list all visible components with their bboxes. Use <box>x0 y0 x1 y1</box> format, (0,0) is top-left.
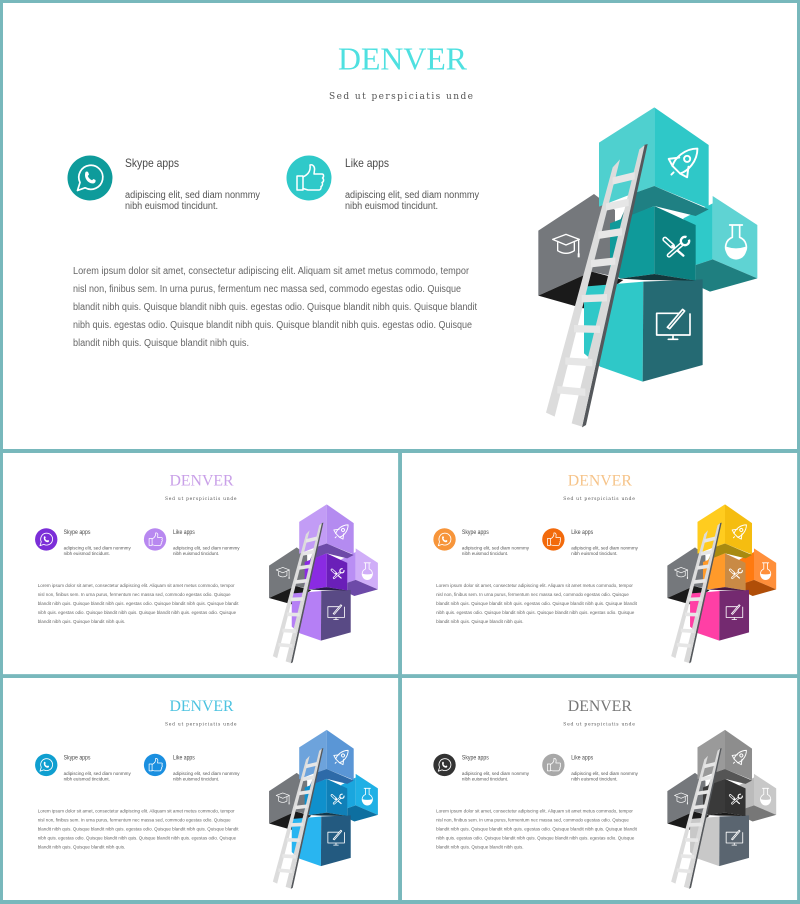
body text: blandit nibh quis. Quisque blandit nibh quis. egestas odio. Quisque blandit nibh quis. Quisque blandit <box>73 302 477 313</box>
cube: rocket <box>299 730 354 786</box>
subtitle: Sed ut perspiciatis unde <box>563 496 635 502</box>
cube: flask <box>683 196 757 292</box>
feature: Skype apps <box>125 156 260 212</box>
body text: Lorem ipsum dolor sit amet, consectetur adipiscing elit. Aliquam sit amet metus commodo, tempor <box>73 266 470 277</box>
title: DENVER <box>169 698 234 715</box>
icon: chat badge <box>433 528 456 551</box>
feature: Like apps: Like apps <box>173 755 195 761</box>
feature: Like apps: Like apps <box>571 530 593 536</box>
subtitle: Sed ut perspiciatis unde <box>329 92 473 102</box>
feature: Like apps: adipiscing elit, sed diam nonmmy <box>345 190 479 201</box>
cube and ladder graphic <box>269 730 378 889</box>
feature: Like apps: adipiscing elit, sed diam nonmmy <box>173 545 240 551</box>
ladder <box>273 748 323 889</box>
cube: flask <box>739 548 776 596</box>
body text: blandit nibh quis. Quisque blandit nibh quis. <box>38 844 125 850</box>
body text: Lorem ipsum dolor sit amet, consectetur adipiscing elit. Aliquam sit amet metus commodo, tempor <box>38 809 235 815</box>
feature: Like apps: adipiscing elit, sed diam nonmmy <box>173 771 240 777</box>
body text: nibh quis. egestas odio. Quisque blandit nibh quis. Quisque blandit nibh quis. egestas odio. Quisque <box>38 836 236 842</box>
feature: Like apps: nibh euismod tincidunt. <box>173 551 219 557</box>
cube: tools <box>703 779 746 816</box>
icon: thumbs up badge <box>542 754 565 776</box>
body text: Lorem ipsum dolor sit amet, consectetur adipiscing elit. Aliquam sit amet metus commodo, tempor <box>436 809 633 815</box>
feature: Like apps: nibh euismod tincidunt. <box>173 776 219 782</box>
cube and ladder graphic <box>667 730 776 889</box>
panel: teal main slide <box>3 3 797 449</box>
feature: Like apps: nibh euismod tincidunt. <box>345 201 438 212</box>
feature: Skype apps: nibh euismod tincidunt. <box>64 776 110 782</box>
body text: blandit nibh quis. Quisque blandit nibh quis. egestas odio. Quisque blandit nibh quis. Quisque blandit <box>38 601 239 607</box>
body text: blandit nibh quis. Quisque blandit nibh quis. <box>38 619 125 625</box>
feature: Skype apps: Skype apps <box>64 530 90 536</box>
ladder <box>671 523 722 663</box>
body text: Lorem ipsum dolor sit amet, consectetur adipiscing elit. Aliquam sit amet metus commodo, tempor <box>436 583 633 589</box>
ladder <box>546 144 648 427</box>
cube: flask <box>341 548 378 596</box>
body text: blandit nibh quis. Quisque blandit nibh quis. egestas odio. Quisque blandit nibh quis. Quisque blandit <box>38 827 239 833</box>
title: DENVER <box>568 473 632 490</box>
panel: orange slide <box>402 453 797 674</box>
body text: nibh quis. egestas odio. Quisque blandit nibh quis. Quisque blandit nibh quis. egestas odio. Quisque <box>38 610 236 616</box>
title: DENVER <box>338 40 468 76</box>
cube: graduation cap <box>667 547 710 604</box>
body text <box>38 583 239 625</box>
body text: blandit nibh quis. Quisque blandit nibh quis. <box>73 338 249 349</box>
cube: rocket <box>599 107 709 221</box>
panel: blue slide <box>3 678 398 900</box>
body text <box>38 809 239 850</box>
feature: Like apps <box>173 755 240 782</box>
body text: nibh quis. egestas odio. Quisque blandit nibh quis. Quisque blandit nibh quis. egestas odio. Quisque <box>73 320 472 331</box>
cube: rocket <box>299 504 354 561</box>
feature: Skype apps: nibh euismod tincidunt. <box>125 201 218 212</box>
subtitle: Sed ut perspiciatis unde <box>165 496 237 502</box>
icon: chat badge <box>35 754 57 776</box>
cube: tools <box>703 553 746 590</box>
feature: Like apps: Like apps <box>173 530 195 536</box>
feature: Like apps: Like apps <box>571 755 593 761</box>
body text <box>436 583 637 625</box>
body text: nisl non, finibus sem. In urna purus, fermentum nec massa sed, commodo egestas odio. Quisque <box>38 818 231 824</box>
cube and ladder graphic <box>269 504 378 663</box>
feature: Like apps: nibh euismod tincidunt. <box>571 776 617 782</box>
feature: Skype apps: nibh euismod tincidunt. <box>64 551 110 557</box>
feature: Like apps: adipiscing elit, sed diam nonmmy <box>571 545 638 551</box>
icon: thumbs up badge <box>286 156 332 200</box>
cube: tools <box>305 553 347 590</box>
cube: graduation cap <box>667 773 710 830</box>
feature: Like apps <box>345 156 479 212</box>
icon: chat badge <box>433 754 456 776</box>
icon: thumbs up badge <box>144 754 166 776</box>
body text: nibh quis. egestas odio. Quisque blandit nibh quis. Quisque blandit nibh quis. egestas odio. Quisque <box>436 610 635 616</box>
panel: purple slide <box>3 453 398 674</box>
panel: grey slide <box>402 678 797 900</box>
cube and ladder graphic <box>538 107 757 427</box>
cube: monitor <box>690 815 749 866</box>
body text: blandit nibh quis. Quisque blandit nibh quis. egestas odio. Quisque blandit nibh quis. Quisque blandit <box>436 601 637 607</box>
body text <box>436 809 637 850</box>
feature: Like apps: Like apps <box>345 156 389 170</box>
feature: Skype apps: adipiscing elit, sed diam nonmmy <box>125 190 260 201</box>
feature: Like apps <box>571 755 638 782</box>
title: DENVER <box>169 473 234 490</box>
feature: Skype apps <box>64 530 131 557</box>
cube: graduation cap <box>269 547 311 604</box>
cube: monitor <box>584 279 703 382</box>
cube: monitor <box>292 590 351 641</box>
body text <box>73 266 477 349</box>
feature: Skype apps <box>64 755 131 782</box>
body text: nibh quis. egestas odio. Quisque blandit nibh quis. Quisque blandit nibh quis. egestas odio. Quisque <box>436 836 635 842</box>
title: DENVER <box>568 698 632 715</box>
cube and ladder graphic <box>667 504 776 663</box>
cube: graduation cap <box>269 773 311 830</box>
feature: Skype apps: adipiscing elit, sed diam nonmmy <box>64 771 131 777</box>
feature: Skype apps: adipiscing elit, sed diam nonmmy <box>462 771 529 777</box>
cube: tools <box>305 779 347 816</box>
body text: nisl non, finibus sem. In urna purus, fermentum nec massa sed, commodo egestas odio. Quisque <box>436 592 629 598</box>
cube: tools <box>610 206 696 281</box>
feature: Like apps: adipiscing elit, sed diam nonmmy <box>571 771 638 777</box>
feature: Skype apps <box>462 755 529 782</box>
icon: chat badge <box>68 156 112 200</box>
feature: Skype apps: nibh euismod tincidunt. <box>462 776 508 782</box>
body text: nisl non, finibus sem. In urna purus, fermentum nec massa sed, commodo egestas odio. Quisque <box>73 284 461 295</box>
icon: thumbs up badge <box>144 528 166 551</box>
cube: monitor <box>292 815 351 866</box>
feature: Skype apps <box>462 530 529 557</box>
body text: blandit nibh quis. Quisque blandit nibh quis. <box>436 844 524 850</box>
feature: Skype apps: Skype apps <box>64 755 90 761</box>
ladder <box>273 523 323 663</box>
body text: blandit nibh quis. Quisque blandit nibh quis. <box>436 619 524 625</box>
feature: Skype apps: nibh euismod tincidunt. <box>462 551 508 557</box>
feature: Skype apps: adipiscing elit, sed diam nonmmy <box>462 545 529 551</box>
cube: graduation cap <box>538 194 623 308</box>
body text: blandit nibh quis. Quisque blandit nibh quis. egestas odio. Quisque blandit nibh quis. Quisque blandit <box>436 827 637 833</box>
body text: nisl non, finibus sem. In urna purus, fermentum nec massa sed, commodo egestas odio. Quisque <box>436 818 629 824</box>
feature: Skype apps: adipiscing elit, sed diam nonmmy <box>64 545 131 551</box>
subtitle: Sed ut perspiciatis unde <box>165 722 237 728</box>
subtitle: Sed ut perspiciatis unde <box>563 722 635 728</box>
cube: rocket <box>698 504 752 561</box>
icon: thumbs up badge <box>542 528 565 551</box>
feature: Skype apps: Skype apps <box>462 755 489 761</box>
cube: rocket <box>698 730 752 786</box>
feature: Like apps <box>173 530 240 557</box>
ladder <box>671 748 722 889</box>
body text: nisl non, finibus sem. In urna purus, fermentum nec massa sed, commodo egestas odio. Quisque <box>38 592 231 598</box>
cube: monitor <box>690 590 749 641</box>
feature: Skype apps: Skype apps <box>462 530 489 536</box>
icon: chat badge <box>35 528 57 551</box>
feature: Skype apps: Skype apps <box>125 156 179 170</box>
feature: Like apps <box>571 530 638 557</box>
feature: Like apps: nibh euismod tincidunt. <box>571 551 617 557</box>
cube: flask <box>341 774 378 821</box>
cube: flask <box>739 774 776 821</box>
body text: Lorem ipsum dolor sit amet, consectetur adipiscing elit. Aliquam sit amet metus commodo, tempor <box>38 583 235 589</box>
